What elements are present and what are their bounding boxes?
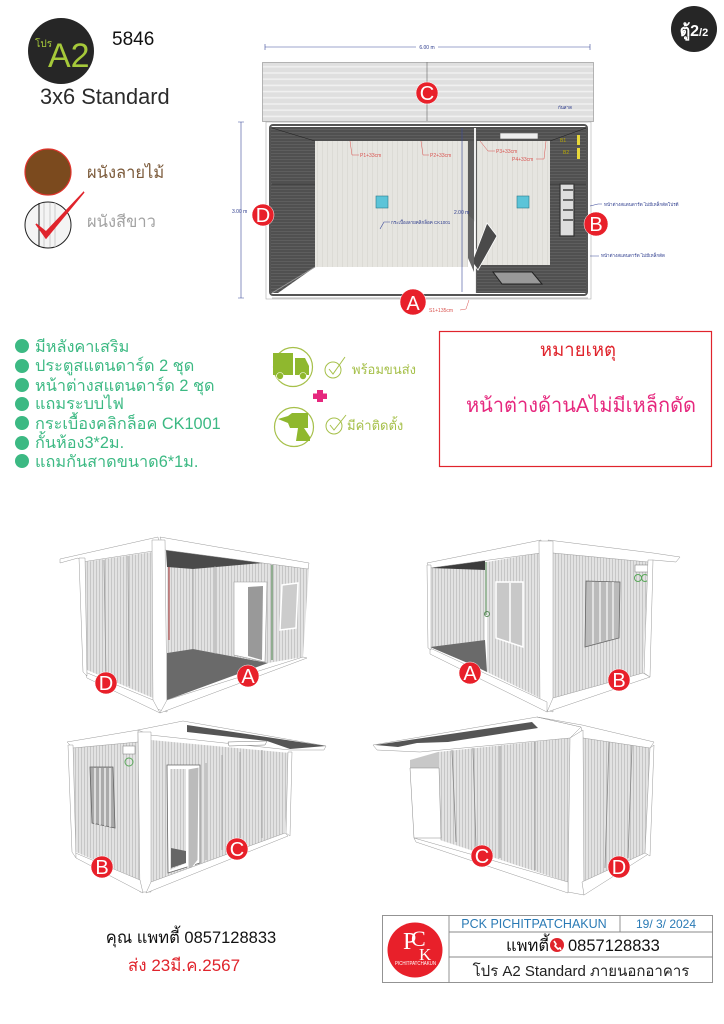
feature list: แถมระบบไฟ	[35, 394, 124, 413]
legend: white wall with check	[25, 192, 156, 248]
view 1 badge A: A	[241, 666, 255, 688]
legend: wood wall: ผนังลายไม้	[87, 163, 164, 182]
view 1 badge D	[95, 672, 117, 695]
legend: wood wall	[25, 149, 164, 195]
icon: delivery truck	[273, 348, 312, 386]
top-right unit badge	[671, 6, 717, 52]
company logo	[388, 922, 442, 978]
promo badge: A2: โปร	[35, 37, 53, 50]
phone number row: แพทตี้	[506, 933, 550, 955]
company logo: C	[411, 926, 426, 951]
icon: power drill	[274, 408, 314, 446]
view 3 badge B: B	[95, 857, 109, 879]
view 4 badge D: D	[612, 857, 626, 879]
view 2 badge A	[459, 662, 481, 685]
perspective view: sides A and B	[427, 540, 680, 712]
awning roof: กันสาด	[558, 105, 572, 110]
view 3 badge C	[226, 838, 248, 861]
width dimension	[265, 44, 590, 51]
plan badge A	[400, 289, 426, 315]
plan annotations: หน้าต่างสแตนดาร์ด ไม่มีเหล็กดัด	[601, 251, 665, 258]
project code: 5846	[112, 29, 154, 50]
view 1 badge A	[237, 665, 259, 688]
plan badge A: A	[406, 293, 420, 315]
partition and door	[468, 128, 497, 293]
remark box: หน้าต่างด้านAไม่มีเหล็กดัด	[466, 392, 696, 417]
plan annotations: S1+135cm	[429, 308, 453, 314]
feature list: มีหลังคาเสริม	[35, 338, 129, 356]
plan badge C	[416, 82, 438, 105]
view 2 badge B	[608, 669, 630, 692]
ready to ship label	[325, 357, 416, 378]
plan badge B: B	[589, 214, 603, 236]
installation fee label	[326, 415, 403, 434]
plan badge C: C	[420, 83, 434, 105]
plan annotations: B1	[560, 138, 566, 144]
container frame	[266, 122, 591, 299]
feature list	[15, 338, 221, 471]
plan annotations: P3+33cm	[496, 149, 517, 155]
feature list: แถมกันสาดขนาด6*1ม.	[35, 453, 198, 471]
title block table: โปร A2 Standard ภายนอกอาคาร	[473, 962, 689, 980]
view 3 badge B	[91, 856, 113, 879]
width dimension: 6.00 m	[419, 45, 435, 51]
plus sign	[313, 390, 327, 402]
remark box	[440, 332, 712, 466]
model title: 3x6 Standard	[40, 84, 170, 109]
feature list: กั้นห้อง3*2ม.	[35, 431, 124, 452]
customer contact: คุณ แพทตี้ 0857128833	[106, 925, 276, 948]
plan badge B	[584, 212, 608, 236]
plan annotations: P4+33cm	[512, 157, 533, 163]
plan annotations: 2.00 m	[454, 210, 469, 216]
delivery date: ส่ง 23มี.ค.2567	[128, 956, 240, 975]
view 2 badge A: A	[463, 663, 477, 685]
promo badge: A2: A2	[48, 37, 90, 75]
feature list: กระเบื้องคลิกล็อค CK1001	[35, 412, 221, 433]
plan annotations: P1+33cm	[360, 153, 381, 159]
phone number row	[506, 933, 660, 955]
perspective view: sides C and D	[373, 717, 654, 895]
floor plan drawing	[232, 44, 679, 314]
company logo: PICHITPATCHAKUN	[395, 961, 436, 967]
view 4 badge C	[471, 845, 493, 868]
dark walls	[271, 127, 586, 293]
awning roof	[262, 62, 594, 122]
title block table: 19/ 3/ 2024	[636, 917, 696, 931]
plan annotations: หน้าต่างสแตนดาร์ด ไม่มีเหล็กดัดโปรดี	[604, 200, 679, 207]
view 2 badge B: B	[612, 670, 626, 692]
view 1 badge D: D	[99, 673, 113, 695]
outer frame rails	[270, 125, 587, 295]
view 3 badge C: C	[230, 839, 244, 861]
height dimension: 3.00 m	[232, 209, 247, 215]
ready to ship label: พร้อมขนส่ง	[352, 362, 416, 377]
view 4 badge C: C	[475, 846, 489, 868]
promo badge: A2	[28, 18, 94, 84]
company logo: P	[403, 929, 416, 955]
plan annotations	[350, 128, 679, 314]
top-right unit badge: ตู้2/2	[680, 22, 708, 42]
title block table: PCK PICHITPATCHAKUN	[461, 917, 607, 931]
perspective view: sides D and A	[60, 537, 309, 713]
height dimension	[232, 122, 247, 298]
feature list: หน้าต่างสแตนดาร์ด 2 ชุด	[35, 376, 215, 396]
phone number row: 0857128833	[568, 937, 660, 955]
plan badge D	[252, 204, 274, 227]
perspective view: sides B and C	[67, 721, 326, 893]
plan annotations: B2	[563, 150, 569, 156]
plan annotations: กระเบื้องลายคลิกล็อค CK1001	[391, 218, 451, 225]
windows	[493, 133, 574, 284]
feature list: ประตูสแตนดาร์ด 2 ชุด	[35, 356, 194, 376]
view 4 badge D	[608, 856, 630, 879]
plan badge D: D	[256, 205, 270, 227]
title block table	[382, 916, 713, 982]
company logo: K	[419, 945, 432, 964]
remark box: หมายเหตุ	[540, 339, 616, 362]
plan annotations: P2+33cm	[430, 153, 451, 159]
legend: white wall with check: ผนังสีขาว	[87, 213, 156, 231]
tiles panels	[376, 196, 388, 208]
installation fee label: มีค่าติดตั้ง	[347, 416, 403, 433]
